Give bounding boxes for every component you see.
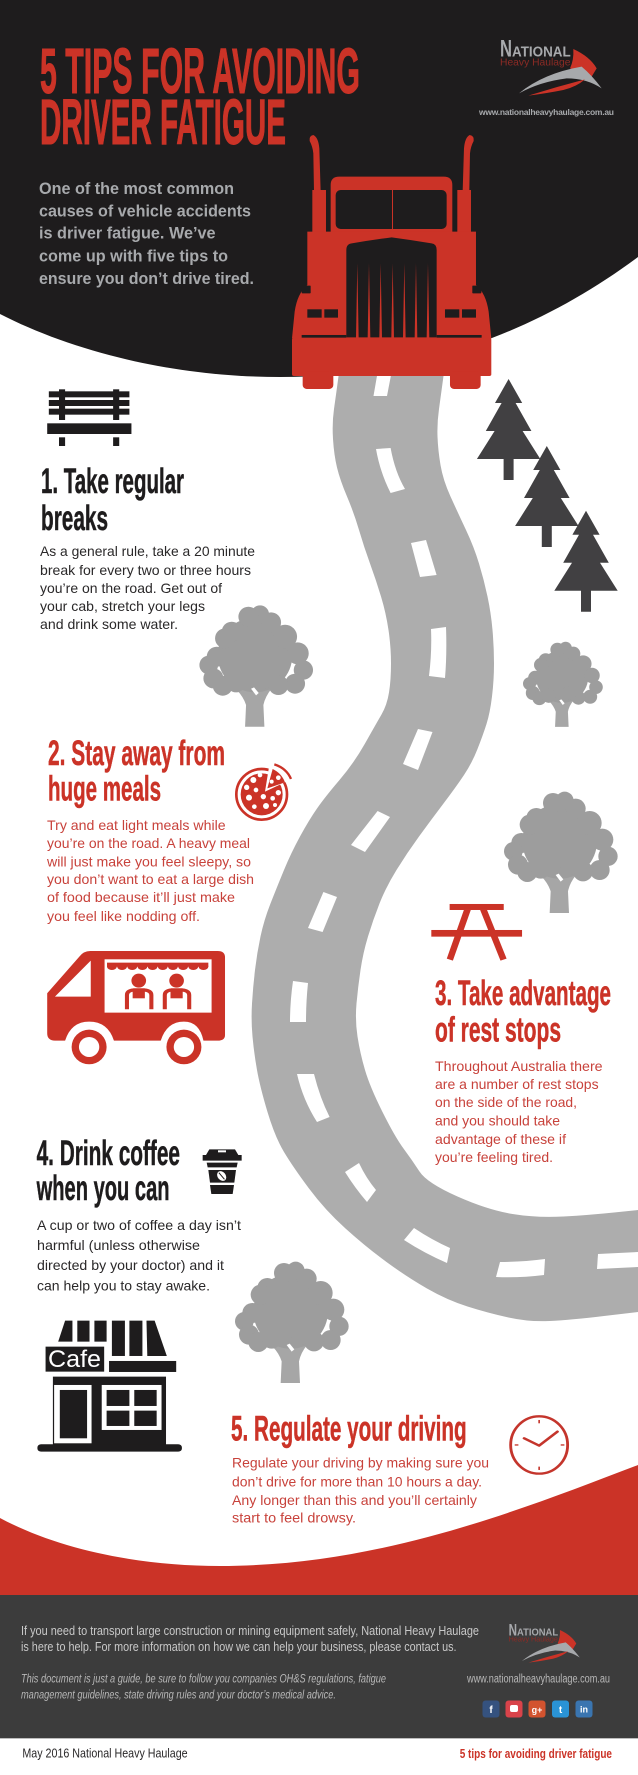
- footer contact text: is here to help. For more information on how we can help your business, please contact us.: [21, 1639, 456, 1654]
- website url: www.nationalheavyhaulage.com.au: [478, 107, 614, 117]
- social icons: in: [580, 1704, 588, 1714]
- social icons: g+: [532, 1705, 542, 1715]
- tip 1 text: your cab, stretch your legs: [40, 598, 205, 614]
- icon: tree: [235, 1262, 349, 1383]
- title: [40, 35, 360, 158]
- footer logo: Heavy Haulage: [509, 1635, 558, 1644]
- tip 5 text: don’t drive for more than 10 hours a day.: [232, 1474, 482, 1490]
- tip 1 heading: breaks: [41, 499, 108, 538]
- footer contact text: If you need to transport large construction or mining equipment safely, National Heavy Haulage: [21, 1623, 479, 1638]
- footer logo: [509, 1620, 580, 1663]
- road dashes: [290, 370, 638, 1277]
- title: DRIVER FATIGUE: [40, 86, 286, 158]
- tip 1 heading: 1. Take regular: [41, 462, 184, 501]
- tip 3 text: advantage of these if: [435, 1131, 566, 1147]
- tip 4 heading: [36, 1134, 180, 1208]
- tip 5 heading: 5. Regulate your driving: [231, 1410, 467, 1449]
- tip 2 text: will just make you feel sleepy, so: [46, 854, 251, 870]
- logo: National Heavy Haulage: N: [500, 36, 512, 63]
- tip 4 text: directed by your doctor) and it: [37, 1257, 224, 1273]
- tip 3 text: are a number of rest stops: [435, 1076, 599, 1092]
- tip 3 text: and you should take: [435, 1113, 560, 1129]
- header panel: [0, 0, 638, 377]
- tip 4 text: can help you to stay awake.: [37, 1278, 210, 1294]
- tip 3 text: [435, 1058, 603, 1165]
- tip 2 text: you’re on the road. A heavy meal: [47, 835, 250, 851]
- tip 1 text: break for every two or three hours: [40, 562, 251, 578]
- intro text: One of the most common: [39, 179, 234, 198]
- intro text: come up with five tips to: [39, 247, 228, 266]
- tip 3 heading: [435, 974, 611, 1050]
- footer disclaimer: management guidelines, state driving rules and your doctor’s medical advice.: [21, 1690, 336, 1702]
- tip 2 heading: huge meals: [48, 770, 161, 809]
- tip 2 text: of food because it’ll just make: [47, 889, 235, 905]
- icon: cafe: [37, 1321, 182, 1452]
- tip 2 text: [46, 817, 254, 924]
- footer disclaimer: This document is just a guide, be sure to follow you companies OH&S regulations, fatigue: [21, 1674, 386, 1686]
- tip 5 text: Any longer than this and you’ll certainly: [232, 1492, 477, 1508]
- footer logo: ATIONAL: [517, 1627, 558, 1638]
- tip 5 text: Regulate your driving by making sure you: [232, 1455, 489, 1471]
- icon: tree: [199, 605, 313, 727]
- icon: picnic table: [431, 904, 522, 961]
- footer logo: N: [509, 1620, 517, 1639]
- icon: tree: [504, 792, 618, 913]
- logo: National Heavy Haulage: Heavy Haulage: [500, 57, 571, 69]
- social icons: [482, 1700, 592, 1718]
- intro text: causes of vehicle accidents: [39, 202, 251, 221]
- bottom date: May 2016 National Heavy Haulage: [22, 1746, 188, 1761]
- tip 4 text: harmful (unless otherwise: [37, 1237, 200, 1253]
- icon: pine trees: [477, 379, 618, 612]
- logo: National Heavy Haulage: ATIONAL: [512, 45, 571, 61]
- tip 1 text: As a general rule, take a 20 minute: [40, 543, 255, 559]
- icon: clock: [511, 1416, 568, 1474]
- tip 4 heading: when you can: [36, 1169, 170, 1208]
- icon: red truck: [292, 135, 491, 389]
- tip 2 text: you don’t want to eat a large dish: [47, 871, 254, 887]
- tip 2 heading: [48, 734, 225, 809]
- tip 4 text: A cup or two of coffee a day isn’t: [37, 1217, 241, 1233]
- tip 4 heading: 4. Drink coffee: [37, 1134, 180, 1173]
- tip 2 text: you feel like nodding off.: [47, 908, 200, 924]
- footer disclaimer: [21, 1674, 386, 1702]
- icon: food truck: [47, 951, 225, 1064]
- tip 3 text: on the side of the road,: [435, 1094, 577, 1110]
- intro text: ensure you don’t drive tired.: [39, 269, 254, 288]
- social icons: f: [489, 1705, 493, 1716]
- footer panel: [0, 1595, 638, 1739]
- social icons: t: [559, 1705, 563, 1716]
- tip 1 text: [40, 543, 255, 632]
- icon: bench: [47, 389, 131, 446]
- tip 3 text: you’re feeling tired.: [435, 1149, 553, 1165]
- tip 3 text: Throughout Australia there: [435, 1058, 603, 1074]
- red wave band: [0, 1465, 638, 1595]
- icon: small tree: [523, 642, 603, 727]
- tip 1 text: you’re on the road. Get out of: [40, 580, 222, 596]
- tip 5 text: start to feel drowsy.: [232, 1510, 356, 1526]
- intro text: [39, 179, 254, 288]
- footer contact text: [21, 1623, 479, 1654]
- road: [252, 365, 638, 1321]
- icon: coffee cup: [203, 1149, 242, 1194]
- tip 1 heading: [41, 462, 184, 538]
- intro text: is driver fatigue. We’ve: [39, 224, 216, 243]
- tip 4 text: [37, 1217, 241, 1294]
- logo: National Heavy Haulage: [500, 36, 602, 96]
- tip 2 text: Try and eat light meals while: [47, 817, 226, 833]
- tip 2 heading: 2. Stay away from: [48, 734, 225, 773]
- tip 5 text: [232, 1455, 489, 1526]
- icon: cafe: Cafe: [48, 1346, 101, 1373]
- icon: pizza: [236, 764, 293, 820]
- tip 1 text: and drink some water.: [40, 616, 178, 632]
